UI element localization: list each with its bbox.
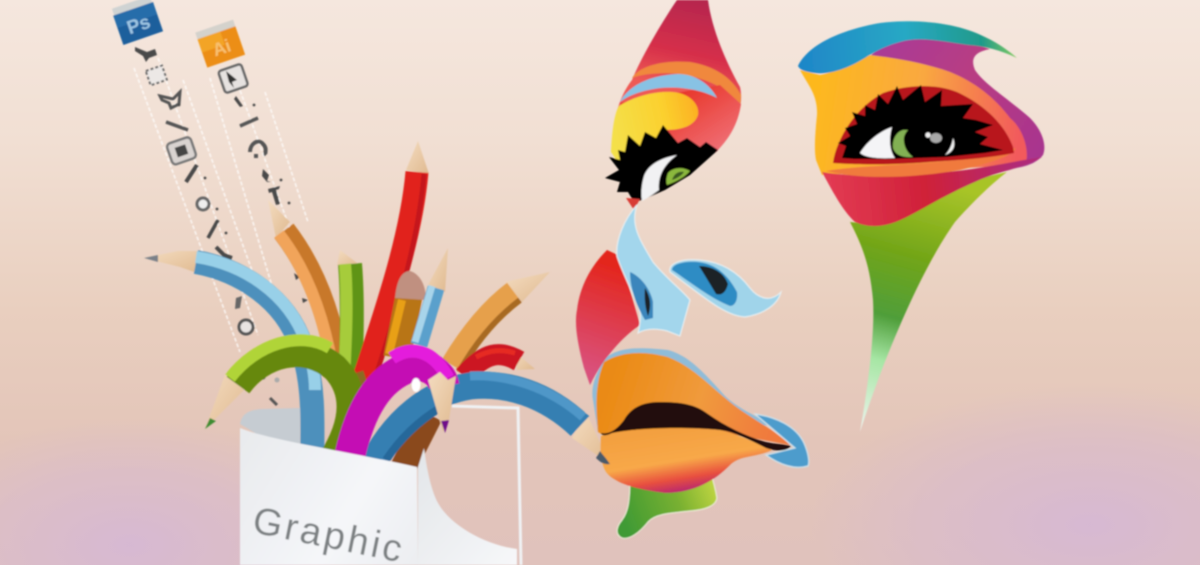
cup: graphic mug <box>240 428 517 565</box>
nose: light blue bridge <box>617 205 690 336</box>
pencil: green arch <box>205 340 350 460</box>
pencil: brown lower <box>402 415 430 470</box>
pencil: green upright <box>337 250 361 380</box>
pencil tip overlapping lips <box>596 451 610 464</box>
cup front <box>240 428 418 565</box>
eye: lower red area <box>620 85 741 160</box>
pencil: inner lower strokes <box>345 375 358 460</box>
lips: blue wing <box>755 414 809 467</box>
eye: yellow lid <box>611 92 698 165</box>
pencil: amber with rounded top <box>389 271 426 358</box>
pencil: tall red <box>358 141 429 395</box>
icon: Ai badge <box>195 20 245 68</box>
toolbar: Illustrator tool strip <box>195 20 330 380</box>
eye: orange band <box>632 62 741 107</box>
lips: green chin <box>617 470 717 538</box>
eye: catchlight <box>925 132 931 138</box>
eye: inner red corner <box>626 198 640 210</box>
lips: dark mouth <box>601 402 791 450</box>
nose: red cheek <box>576 250 640 385</box>
icon: Ai badge: Ai <box>210 36 233 60</box>
eye: lashes <box>838 85 1003 159</box>
eye: purple lid <box>870 38 1044 170</box>
nose: left nostril <box>630 272 653 320</box>
pencil: magenta arch <box>350 351 456 455</box>
icon: Ps badge <box>111 0 163 45</box>
eye: lower red cheek <box>822 157 1042 226</box>
eye: highlight <box>930 133 942 143</box>
icon: Ps badge: Ps <box>124 12 153 39</box>
pencil: light blue slim <box>415 248 448 345</box>
eye: dark red socket <box>833 86 1014 164</box>
eye: orange lid <box>800 55 1027 175</box>
icons: Photoshop tools <box>135 47 280 405</box>
cup handle cutout <box>418 448 517 565</box>
lips: blue outline <box>592 348 772 432</box>
icons: Illustrator tools <box>218 64 308 303</box>
eye: crimson lid <box>612 0 741 160</box>
eye: orange under band <box>826 148 1016 177</box>
eye: blue brow <box>798 21 1017 73</box>
cup inner back wall <box>240 408 300 445</box>
toolbar: Photoshop tool strip <box>111 0 280 405</box>
pencil: orange curved <box>268 200 338 365</box>
eye: lashes <box>605 125 718 202</box>
pencil: short red <box>464 351 535 376</box>
outline: back cup handle line <box>452 406 521 565</box>
face: left eye <box>605 0 741 210</box>
face: right eye <box>798 21 1044 432</box>
eye: right sclera <box>945 138 954 155</box>
face: lips <box>592 348 809 538</box>
eye: green iris <box>666 168 690 185</box>
eye: green teardrop tail <box>850 172 1007 432</box>
pencil: orange right <box>452 272 550 372</box>
pencil: blue right arch <box>372 376 610 465</box>
pencil: left light blue <box>144 251 315 465</box>
eye: blue band <box>620 74 717 102</box>
lips: lower lip <box>601 429 772 493</box>
face: nose <box>576 205 781 385</box>
lips: upper lip <box>596 353 790 445</box>
nose: right nostril wing <box>670 260 781 317</box>
eye: green iris <box>893 130 913 157</box>
eye: white sclera <box>641 155 677 201</box>
eye: white sclera <box>860 127 895 158</box>
